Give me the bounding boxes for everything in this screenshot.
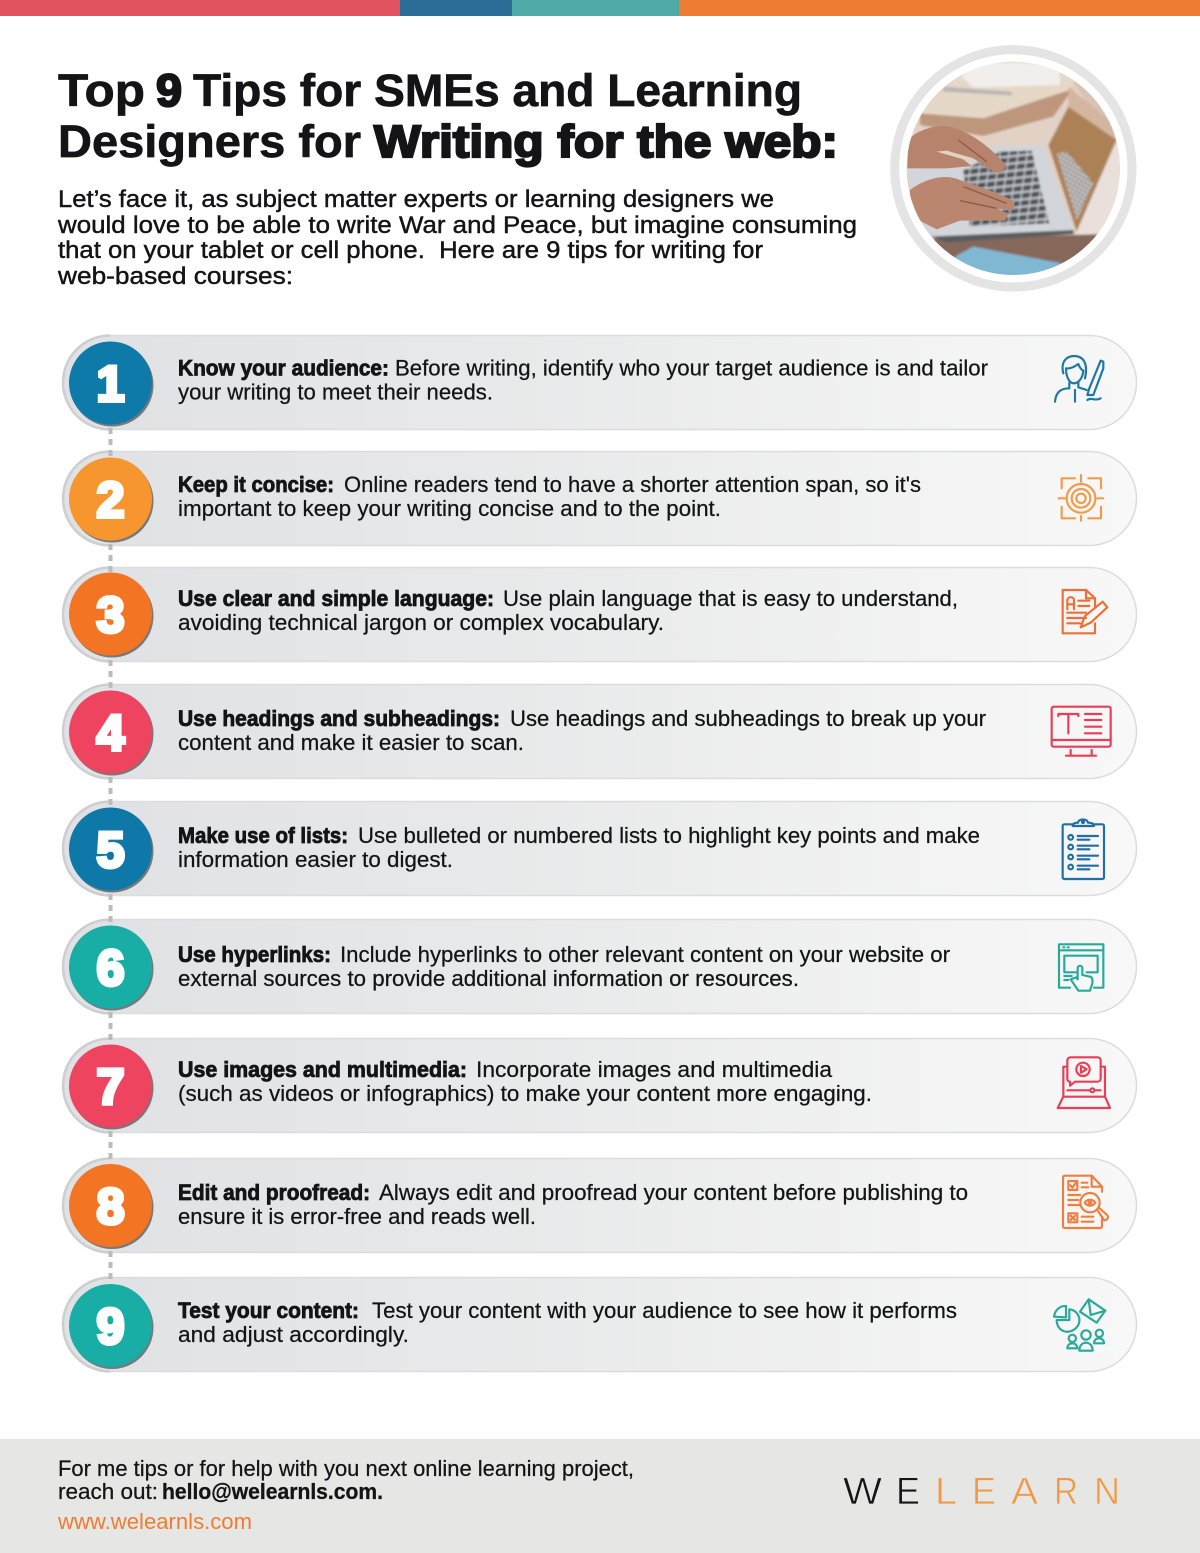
tip 9 text: Test your content: bbox=[178, 1298, 359, 1323]
number badge 3: 3 bbox=[97, 587, 124, 643]
tip 3 text: Use plain language that is easy to understand, bbox=[503, 586, 958, 611]
logo: WELEARN: N bbox=[1094, 1471, 1120, 1513]
tip 1 text: Know your audience: bbox=[178, 356, 389, 380]
logo: WELEARN: E bbox=[972, 1471, 996, 1513]
tip 7 bbox=[63, 1038, 1136, 1132]
tip 8 text bbox=[178, 1180, 968, 1229]
logo: WELEARN: A bbox=[1011, 1471, 1039, 1513]
tip 8 text: Edit and proofread: bbox=[178, 1180, 370, 1205]
tip 6 text: Include hyperlinks to other relevant content on your website or bbox=[340, 942, 950, 967]
number badge 7 bbox=[69, 1044, 154, 1130]
number badge 4: 4 bbox=[97, 705, 125, 761]
tip 1 text: Before writing, identify who your target audience is and tailor bbox=[395, 356, 988, 380]
title: Writing for the web: bbox=[374, 116, 838, 167]
top colour bar bbox=[0, 0, 1200, 16]
tip 8 bbox=[63, 1158, 1136, 1252]
number badge 6 bbox=[69, 926, 154, 1010]
icon: document and pencil bbox=[1063, 590, 1107, 633]
icon: browser with pointer bbox=[1059, 944, 1103, 991]
intro paragraph bbox=[57, 186, 857, 290]
tip 6 text: external sources to provide additional information or resources. bbox=[178, 966, 799, 991]
tip 5 text: Make use of lists: bbox=[178, 823, 348, 848]
icon: target bbox=[1059, 475, 1103, 521]
tip 6 text bbox=[178, 942, 950, 991]
photo: hands typing on a laptop bbox=[895, 50, 1132, 287]
title: Top bbox=[58, 65, 145, 116]
tip 5 text: Use bulleted or numbered lists to highlight key points and make bbox=[358, 823, 980, 848]
logo: WELEARN: R bbox=[1054, 1471, 1078, 1513]
logo: WELEARN bbox=[843, 1471, 1120, 1513]
number badge 5 bbox=[69, 808, 154, 892]
tip 8 text: Always edit and proofread your content before publishing to bbox=[379, 1180, 968, 1205]
icon: monitor with text bbox=[1052, 707, 1111, 756]
title: Designers for bbox=[58, 116, 361, 167]
pill background 9 bbox=[64, 1278, 1136, 1372]
number badge 1 bbox=[69, 342, 154, 426]
number badge 8: 8 bbox=[97, 1178, 124, 1234]
logo: WELEARN: W bbox=[843, 1471, 882, 1513]
tip 9 text: and adjust accordingly. bbox=[178, 1322, 409, 1347]
number badge 7: 7 bbox=[97, 1059, 124, 1115]
intro paragraph: that on your tablet or cell phone. Here are 9 tips for writing for bbox=[58, 237, 763, 264]
tip 7 text: Incorporate images and multimedia bbox=[476, 1057, 833, 1082]
title: 9 bbox=[156, 65, 182, 116]
tip 2 text: Online readers tend to have a shorter attention span, so it's bbox=[344, 472, 921, 497]
tip 7 text bbox=[178, 1057, 872, 1106]
pill background 6 bbox=[64, 920, 1136, 1014]
icon: document with magnifier bbox=[1063, 1176, 1108, 1228]
tip 9 bbox=[63, 1278, 1136, 1372]
tip 2 text: Keep it concise: bbox=[178, 472, 334, 497]
tip 3 text bbox=[178, 586, 958, 635]
title: Tips for SMEs and Learning bbox=[193, 65, 802, 116]
number badge 2: 2 bbox=[97, 472, 124, 528]
tip 3 bbox=[63, 568, 1136, 662]
logo: WELEARN: L bbox=[935, 1471, 957, 1513]
intro paragraph: would love to be able to write War and Peace, but imagine consuming bbox=[57, 212, 857, 239]
tip 5 text: information easier to digest. bbox=[178, 847, 453, 872]
pill background 1 bbox=[64, 336, 1136, 430]
tip 3 text: avoiding technical jargon or complex vocabulary. bbox=[178, 610, 664, 635]
footer contact text: www.welearnls.com bbox=[57, 1509, 252, 1534]
number badge 9 bbox=[69, 1284, 154, 1369]
footer contact text: reach out: bbox=[58, 1479, 158, 1504]
tip 8 text: ensure it is error-free and reads well. bbox=[178, 1204, 536, 1229]
number badge 4 bbox=[69, 690, 154, 776]
tip 7 text: Use images and multimedia: bbox=[178, 1057, 467, 1082]
tip 2 text bbox=[178, 472, 921, 521]
tip 4 text bbox=[178, 706, 986, 755]
tip 4 text: content and make it easier to scan. bbox=[178, 730, 524, 755]
footer contact text bbox=[57, 1456, 634, 1534]
number badge 6: 6 bbox=[97, 940, 124, 996]
number badge 8 bbox=[69, 1164, 154, 1249]
connector: dotted line between tips bbox=[108, 428, 112, 1282]
pill background 8 bbox=[64, 1158, 1136, 1252]
icon: chart, envelope and people bbox=[1054, 1299, 1105, 1351]
tip 9 text: Test your content with your audience to see how it performs bbox=[372, 1298, 957, 1323]
tip 1 text bbox=[178, 356, 988, 404]
footer contact text: hello@welearnls.com. bbox=[162, 1479, 383, 1504]
number badge 2 bbox=[69, 458, 154, 542]
title bbox=[58, 65, 838, 167]
tip 9 text bbox=[178, 1298, 957, 1347]
tip 6 text: Use hyperlinks: bbox=[178, 942, 331, 967]
pill background 7 bbox=[64, 1038, 1136, 1132]
icon: laptop with video bubble bbox=[1058, 1057, 1110, 1108]
tip 6 bbox=[63, 920, 1136, 1014]
tip 5 text bbox=[178, 823, 980, 872]
intro paragraph: web-based courses: bbox=[57, 263, 293, 290]
pill background 3 bbox=[64, 568, 1136, 662]
icon: person with pen bbox=[1055, 356, 1103, 402]
logo: WELEARN: E bbox=[896, 1471, 920, 1513]
number badge 3 bbox=[69, 572, 154, 658]
pill background 4 bbox=[64, 684, 1136, 778]
tip 4 bbox=[63, 684, 1136, 778]
tip 3 text: Use clear and simple language: bbox=[178, 586, 494, 611]
tip 5 bbox=[63, 802, 1136, 896]
tip 7 text: (such as videos or infographics) to make your content more engaging. bbox=[178, 1081, 872, 1106]
pill background 5 bbox=[64, 802, 1136, 896]
tip 4 text: Use headings and subheadings: bbox=[178, 706, 500, 731]
intro paragraph: Let’s face it, as subject matter experts or learning designers we bbox=[58, 186, 774, 213]
number badge 9: 9 bbox=[97, 1298, 124, 1354]
tip 1 text: your writing to meet their needs. bbox=[178, 380, 493, 404]
tip 1 bbox=[63, 336, 1136, 430]
tip 2 text: important to keep your writing concise and to the point. bbox=[178, 496, 721, 521]
footer band bbox=[0, 1439, 1200, 1553]
tip 4 text: Use headings and subheadings to break up your bbox=[510, 706, 986, 731]
footer contact text: For me tips or for help with you next online learning project, bbox=[58, 1456, 634, 1481]
number badge 5: 5 bbox=[97, 822, 124, 878]
pill background 2 bbox=[64, 452, 1136, 546]
tip 2 bbox=[63, 452, 1136, 546]
icon: clipboard list bbox=[1063, 819, 1104, 879]
number badge 1: 1 bbox=[97, 356, 124, 412]
